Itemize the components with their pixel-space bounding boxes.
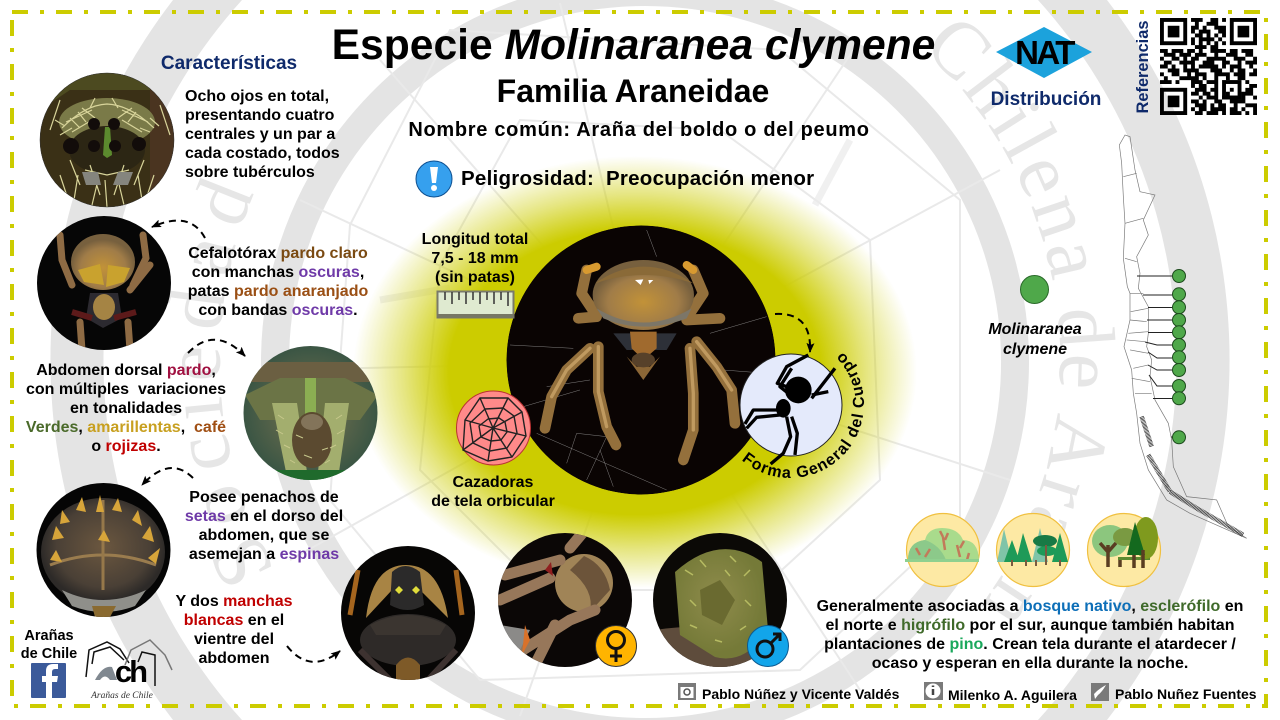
icon: orb web <box>456 391 530 465</box>
heading: Características: Características <box>161 53 297 74</box>
arrow: to green abdomen photo <box>188 340 245 356</box>
heading: Referencias: Referencias <box>1134 21 1152 113</box>
icon: info credit <box>924 682 943 700</box>
arrow: to spines photo <box>142 468 193 485</box>
icon: male badge <box>748 626 788 666</box>
icon: female badge <box>596 626 636 666</box>
background watermark: rings, web and lettering: Sociedad <box>168 178 271 584</box>
logo: Arañas de Chile: Arañas de Chile <box>90 691 153 701</box>
icon: shrubland habitat <box>905 514 980 586</box>
text: longitud: Longitud total 7,5 - 18 mm (sin patas) <box>422 230 528 286</box>
label: Forma General del Cuerpo: Forma General del Cuerpo <box>742 354 864 478</box>
photo: male <box>653 533 788 667</box>
heading: Distribución: Distribución <box>991 89 1101 110</box>
text: Arañas de Chile: Arañas de Chile <box>21 628 77 662</box>
logo: Arañas de Chile <box>86 640 172 701</box>
credit: illustrator: Pablo Nuñez Fuentes <box>1115 686 1257 702</box>
icon: conifer forest habitat <box>996 514 1070 586</box>
icon: brush credit <box>1091 683 1109 701</box>
arrow: to silhouette <box>775 314 810 352</box>
icon: ruler <box>437 292 514 318</box>
icon: info warning <box>416 161 452 197</box>
credit: photographers: Pablo Núñez y Vicente Valdés <box>702 686 899 702</box>
text: setas: Posee penachos de setas en el dorso del abdomen, que se asemejan a espinas <box>185 488 343 563</box>
icon: NAT diamond: NAT <box>1015 34 1075 71</box>
credit: text author: Milenko A. Aguilera <box>948 687 1077 703</box>
photo: eyes close-up <box>40 73 174 207</box>
text: web type: Cazadoras de tela orbicular <box>431 474 555 510</box>
logo: Arañas de Chile: ch <box>115 654 147 689</box>
danger level: Peligrosidad: Preocupación menor <box>461 167 814 190</box>
icon: body silhouette <box>740 354 842 464</box>
text: eyes: Ocho ojos en total, presentando cuatro centrales y un par a cada costado, todos sobre tubérculos <box>185 88 340 181</box>
text: abdomen: Abdomen dorsal pardo, con múltiples variaciones en tonalidades Verdes, amarillentas, café o rojizas. <box>26 362 226 455</box>
photo: abdomen with spines <box>36 483 172 617</box>
text: manchas: Y dos manchas blancas en el vientre del abdomen <box>175 592 293 667</box>
icon: camera credit <box>678 683 696 700</box>
family heading: Familia Araneidae <box>497 73 769 109</box>
photo: ventral abdomen <box>341 546 475 680</box>
photo: cefalotórax dorsal <box>37 216 171 350</box>
QR code <box>1160 20 1257 113</box>
title: Especie Molinaranea clymene <box>332 21 935 69</box>
legend: green dot <box>1020 276 1048 304</box>
photo: abdomen green <box>243 346 379 482</box>
common name: Nombre común: Araña del boldo o del peumo <box>408 119 870 141</box>
icon: Facebook <box>31 663 66 698</box>
icon: NAT diamond <box>996 27 1092 78</box>
map: Chile distribution <box>1119 135 1247 538</box>
legend label: Molinaranea clymene <box>988 321 1082 358</box>
text: cefalotórax: Cefalotórax pardo claro con manchas oscuras, patas pardo anaranjado con bandas oscuras. <box>188 244 368 319</box>
icon: mixed forest habitat <box>1088 514 1160 586</box>
arrow: to cefalotórax photo <box>152 221 205 238</box>
text: habitat: Generalmente asociadas a bosque nativo, esclerófilo en el norte e higrófilo por el sur, aunque también habitan plantaciones de pino. Crean tela durante el atardecer / ocaso y esperan en ella durante la noche. <box>817 598 1243 672</box>
main photo: spider <box>506 226 776 494</box>
arrow: to ventral photo <box>287 646 340 662</box>
photo: female <box>498 530 632 667</box>
